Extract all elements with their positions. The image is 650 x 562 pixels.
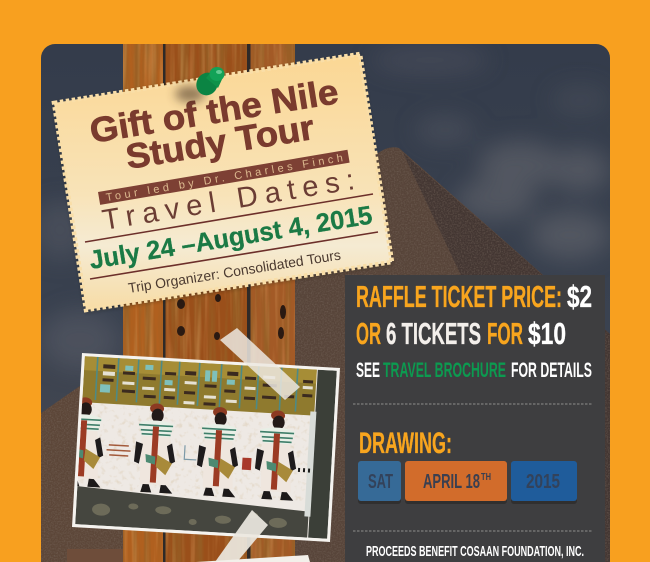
hieroglyph band <box>82 356 317 416</box>
ticket shadow <box>54 55 392 312</box>
day button: SAT <box>368 471 393 493</box>
icon: push pin <box>175 67 224 102</box>
month button: APRIL 18 <box>423 471 480 493</box>
figures <box>60 396 299 501</box>
sky <box>41 44 610 413</box>
day button <box>358 461 401 504</box>
stone texture <box>41 140 610 562</box>
pyramid shaded face <box>403 153 610 562</box>
title <box>87 72 341 177</box>
tour leader banner: Tour led by Dr. Charles Finch <box>105 152 344 204</box>
main pyramid <box>295 147 543 562</box>
year button: 2015 <box>526 471 560 493</box>
floor <box>75 486 309 538</box>
left pyramid <box>41 386 123 562</box>
title: Study Tour <box>123 108 317 177</box>
month button: TH <box>481 472 491 483</box>
wall glyphs <box>106 444 310 473</box>
brochure note: SEE <box>356 359 380 382</box>
date buttons <box>358 461 577 504</box>
panel background <box>345 275 605 562</box>
month button <box>405 461 507 504</box>
dates: July 24 –August 4, 2015 <box>87 200 374 275</box>
second photo edge <box>196 555 310 562</box>
wall speckle <box>77 399 314 503</box>
brochure note: TRAVEL BROCHURE <box>383 359 506 382</box>
drawing heading: DRAWING: <box>359 427 452 460</box>
ticket <box>54 54 392 312</box>
raffle price line 1: $2 <box>567 279 592 314</box>
trip organizer: Trip Organizer: Consolidated Tours <box>127 247 342 296</box>
photo: tomb wall <box>58 352 340 542</box>
ticket body <box>54 54 392 310</box>
clouds <box>32 46 610 370</box>
year button <box>511 461 577 504</box>
wall <box>78 370 318 538</box>
nail holes <box>177 326 185 336</box>
raffle price line 2: FOR <box>487 316 523 351</box>
raffle price line 2: OR <box>356 316 381 351</box>
wooden post <box>123 44 295 562</box>
travel dates heading: Travel Dates: <box>100 164 357 237</box>
raffle price line 2: 6 TICKETS <box>386 316 481 351</box>
white frame <box>72 353 340 542</box>
dark recess <box>308 370 337 539</box>
top tape <box>220 328 300 400</box>
rules <box>85 194 378 279</box>
raffle price line 2: $10 <box>528 316 566 351</box>
bottom tape <box>215 510 268 562</box>
title: Gift of the Nile <box>87 72 341 151</box>
panel: raffle details <box>345 275 605 562</box>
brochure note: FOR DETAILS <box>511 359 592 382</box>
lower brown block <box>67 549 123 562</box>
